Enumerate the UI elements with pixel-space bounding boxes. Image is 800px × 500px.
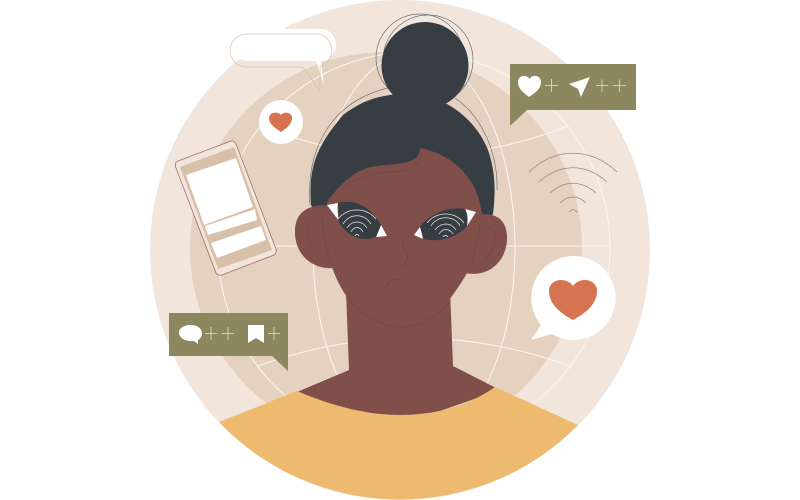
background inner circle xyxy=(190,52,582,444)
right ear xyxy=(465,214,507,274)
double plus signs xyxy=(596,80,626,92)
small heart badge xyxy=(259,100,303,144)
right eye wifi arcs xyxy=(427,214,464,237)
top right reaction banner xyxy=(510,64,636,126)
phone main screen xyxy=(186,158,253,225)
globe grid lines xyxy=(218,52,610,444)
speech bubble outline and fill xyxy=(230,29,336,91)
plus sign xyxy=(545,79,558,92)
neck and shoulders xyxy=(290,290,500,425)
right ear crease xyxy=(471,225,480,262)
left ear crease xyxy=(322,215,330,260)
phone xyxy=(175,140,277,276)
mouth xyxy=(385,279,400,290)
face xyxy=(322,148,482,327)
hair xyxy=(310,94,495,240)
double plus signs xyxy=(205,327,234,340)
send arrow icon xyxy=(569,77,590,97)
shirt xyxy=(219,387,578,500)
wifi signal arcs xyxy=(529,153,617,212)
heart icon xyxy=(518,76,541,97)
hair outlines xyxy=(310,14,497,205)
jaw line xyxy=(346,297,450,327)
plus sign xyxy=(268,327,280,340)
comment icon xyxy=(179,325,202,344)
large heart speech bubble xyxy=(531,256,616,340)
nose xyxy=(401,238,408,267)
phone lower strip xyxy=(211,226,266,258)
bookmark icon xyxy=(248,325,264,343)
right eye xyxy=(414,208,476,240)
left ear xyxy=(295,205,340,268)
background outer circle xyxy=(150,0,650,500)
bottom left comment banner xyxy=(169,313,288,371)
left eye wifi arcs xyxy=(338,210,376,236)
left eye xyxy=(327,202,387,239)
hair bun xyxy=(382,22,468,109)
phone text strip xyxy=(205,209,257,235)
hairline stroke xyxy=(327,148,421,203)
